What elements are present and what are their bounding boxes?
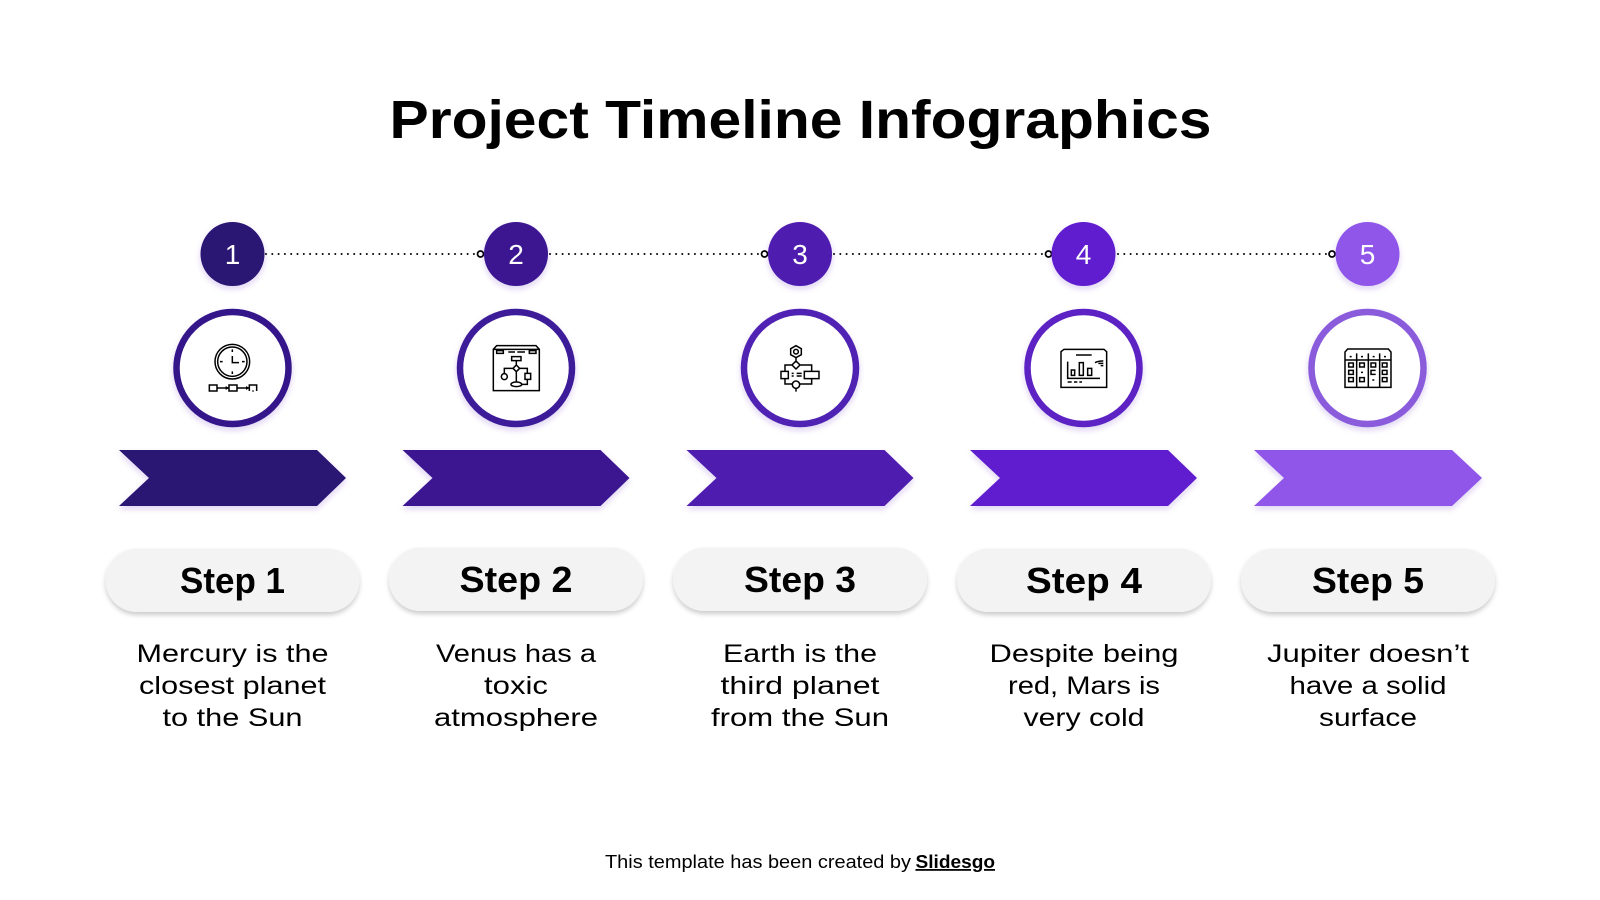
step label pill 4: Step 4 — [1026, 560, 1142, 601]
footer credit: Slidesgo — [916, 852, 995, 872]
icon ring 2 — [460, 312, 572, 424]
description 1: closest planet — [139, 672, 326, 700]
step label pill 2: Step 2 — [460, 559, 572, 600]
description 2: atmosphere — [434, 704, 598, 732]
step label pill 5 — [1241, 548, 1495, 612]
number badge 1 — [200, 222, 264, 286]
icon: kanban calendar — [1345, 349, 1391, 387]
description 3: from the Sun — [711, 704, 889, 732]
icon: clock with process steps — [209, 344, 257, 391]
description 3: third planet — [720, 672, 880, 700]
step label pill 5: Step 5 — [1312, 560, 1424, 601]
chevron 1 — [119, 450, 346, 506]
icon ring 3 — [744, 312, 856, 424]
icon ring 5 — [1312, 312, 1424, 424]
panel: step 4 — [957, 222, 1211, 732]
panel: step 3 — [673, 222, 927, 732]
number badge 5 — [1336, 222, 1400, 286]
description 1: Mercury is the — [136, 640, 328, 668]
description 1 — [136, 640, 328, 732]
description 2: toxic — [484, 672, 548, 700]
description 3: Earth is the — [723, 640, 877, 668]
title: Project Timeline Infographics — [390, 90, 1212, 150]
description 5: have a solid — [1290, 672, 1446, 700]
number badge 4: 4 — [1076, 239, 1091, 270]
panel: step 1 — [106, 222, 360, 732]
icon: bar chart window — [1061, 349, 1107, 387]
number badge 4 — [1052, 222, 1116, 286]
step label pill 3 — [673, 548, 927, 611]
description 5: Jupiter doesn’t — [1267, 640, 1469, 668]
chevron 3 — [686, 450, 914, 506]
icon ring 4 — [1028, 312, 1140, 424]
chevron 5 — [1254, 450, 1482, 506]
panel: step 2 — [389, 222, 643, 732]
chevron 2 — [402, 450, 630, 506]
step label pill 1 — [106, 548, 360, 612]
footer credit: This template has been created by — [605, 852, 911, 872]
step label pill 4 — [957, 548, 1211, 612]
number badge 2 — [484, 222, 548, 286]
panel: step 5 — [1241, 222, 1495, 732]
icon: flowchart window — [493, 346, 539, 391]
chevron 4 — [970, 450, 1197, 506]
step label pill 1: Step 1 — [180, 560, 285, 601]
description 4: red, Mars is — [1008, 672, 1160, 700]
description 1: to the Sun — [162, 704, 302, 732]
number badge 3 — [768, 222, 832, 286]
number badge 2: 2 — [508, 239, 524, 270]
description 4: Despite being — [990, 640, 1178, 668]
dotted timeline connector — [266, 251, 1335, 257]
description 5 — [1267, 640, 1469, 732]
description 5: surface — [1319, 704, 1417, 732]
description 4: very cold — [1024, 704, 1144, 732]
step label pill 2 — [389, 548, 643, 611]
description 2 — [434, 640, 598, 732]
number badge 3: 3 — [792, 239, 808, 270]
number badge 1: 1 — [225, 239, 240, 270]
description 4 — [990, 640, 1178, 732]
description 2: Venus has a — [436, 640, 596, 668]
icon: gear flowchart — [781, 346, 819, 392]
number badge 5: 5 — [1360, 239, 1375, 270]
icon ring 1 — [176, 312, 288, 424]
description 3 — [711, 640, 889, 732]
step label pill 3: Step 3 — [744, 559, 856, 600]
